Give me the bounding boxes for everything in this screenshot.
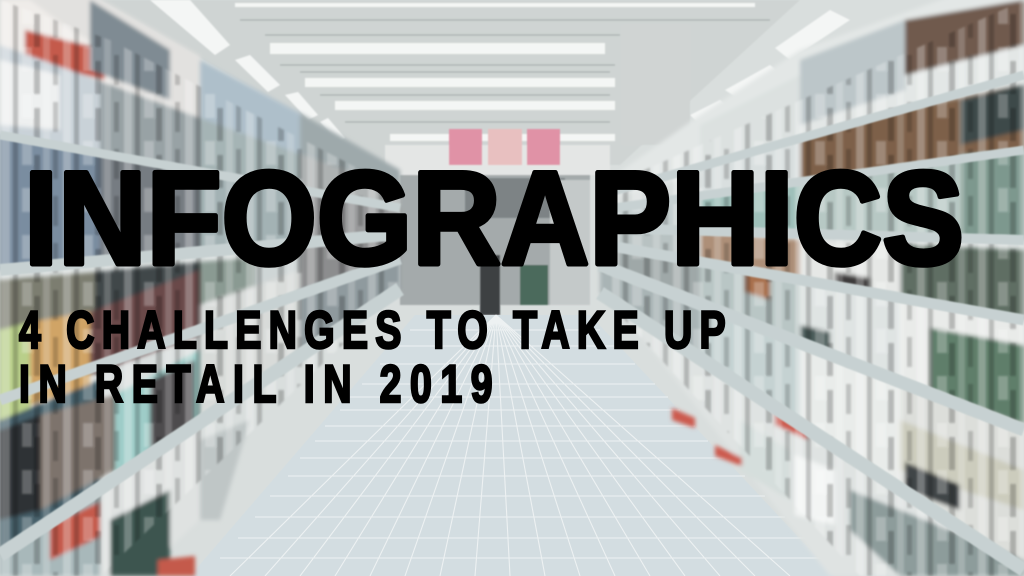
subtitle line 2: IN RETAIL IN 2019 <box>19 354 493 413</box>
right shelves <box>600 0 1024 576</box>
floor tiles <box>190 315 835 576</box>
left shelves <box>0 0 400 576</box>
title: INFOGRAPHICS <box>24 145 964 293</box>
back wall with signs <box>385 25 690 315</box>
ceiling with lights <box>100 0 850 165</box>
subtitle line 1: 4 CHALLENGES TO TAKE UP <box>19 300 726 359</box>
subtitle <box>19 300 726 413</box>
